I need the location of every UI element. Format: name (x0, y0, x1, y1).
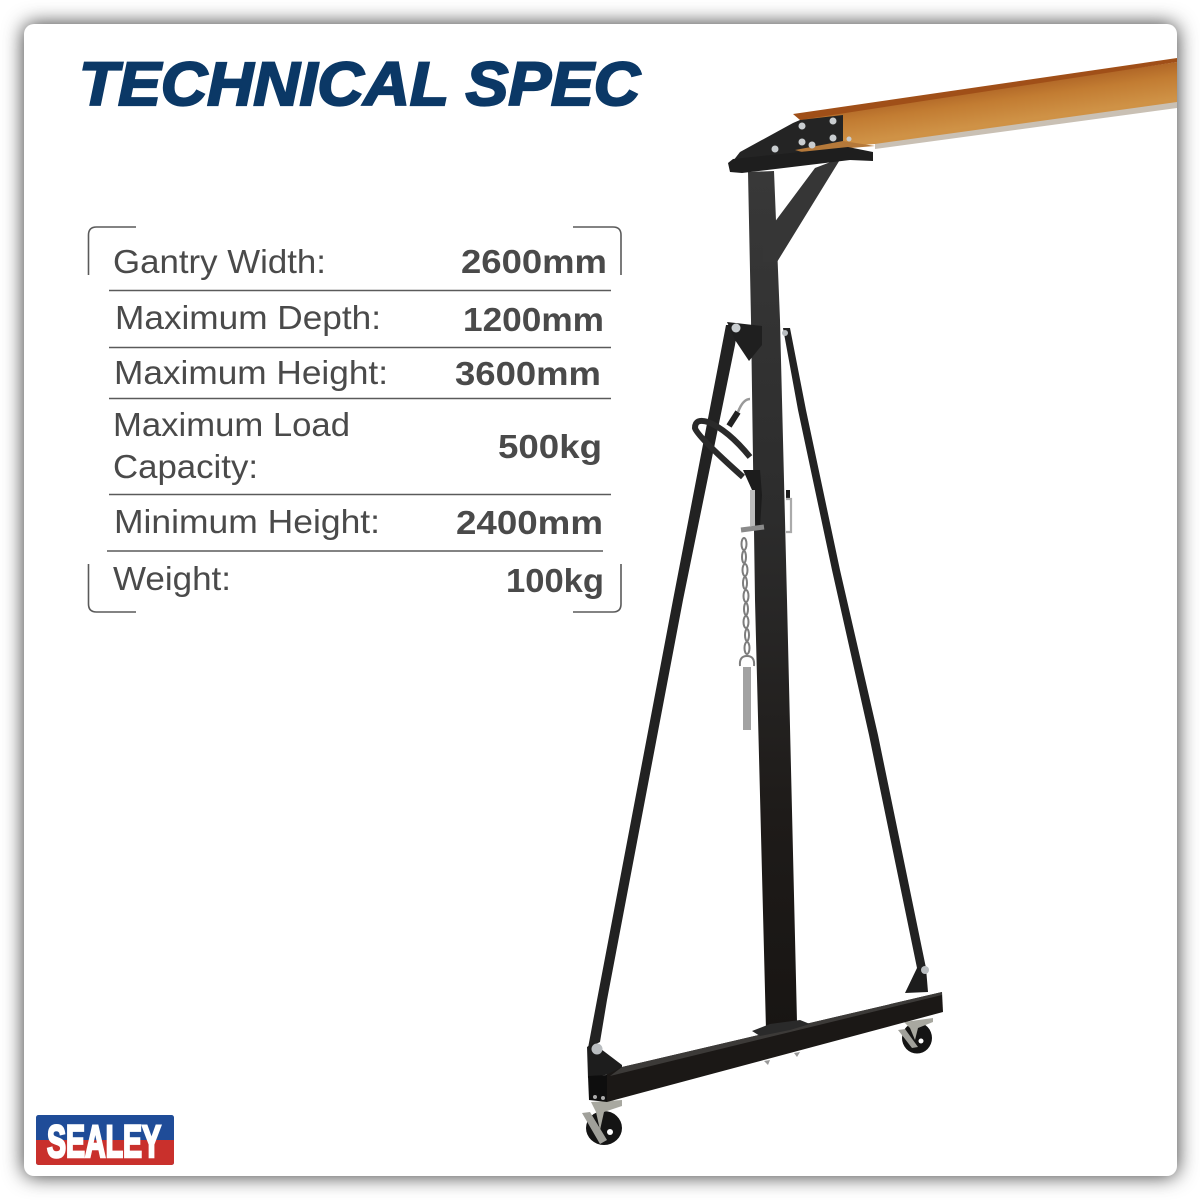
logo: Sealey: SEALEY (47, 1116, 161, 1167)
steel beam (793, 58, 1177, 150)
logo: Sealey (36, 1115, 174, 1167)
row: minimum height: 2400mm (456, 504, 603, 541)
row: weight: 100kg (506, 562, 604, 599)
mounting plate with bolts (733, 115, 875, 161)
row: maximum depth (115, 299, 604, 338)
right leg (783, 328, 926, 968)
row: minimum height (114, 503, 603, 541)
row: maximum depth: 1200mm (463, 301, 604, 338)
top leg brackets (727, 322, 788, 361)
row: maximum height (114, 354, 601, 392)
column foot plate (752, 1020, 810, 1065)
casters (582, 1018, 933, 1145)
brace (776, 161, 839, 261)
base gussets (587, 966, 929, 1078)
row: maximum load capacity: Capacity: (113, 448, 258, 485)
left leg (588, 325, 738, 1048)
row: maximum height: 3600mm (455, 355, 601, 392)
title: TECHNICAL SPEC (79, 50, 641, 118)
row dividers (107, 290, 611, 551)
row: maximum load capacity (113, 406, 602, 485)
chain (740, 538, 754, 666)
corner brackets (88, 227, 621, 612)
row: weight: Weight: (113, 560, 231, 597)
base bar (588, 992, 943, 1102)
row: maximum height: Maximum Height: (114, 354, 388, 391)
row: gantry width: 2600mm (461, 243, 607, 280)
handle grip stem (729, 399, 750, 426)
row: maximum load capacity: Maximum Load (113, 406, 350, 443)
handle loop (695, 421, 750, 477)
locking pin (743, 667, 751, 730)
panel: specification table (88, 227, 621, 612)
main column (748, 171, 797, 1030)
illustration: gantry crane (582, 58, 1177, 1145)
row: gantry width (113, 243, 607, 280)
row: weight (113, 560, 604, 599)
row: maximum depth: Maximum Depth: (115, 299, 381, 336)
top platform (728, 147, 873, 173)
row: maximum load capacity: 500kg (498, 428, 602, 465)
latch mechanism (741, 470, 791, 532)
row: minimum height: Minimum Height: (114, 503, 380, 540)
row: gantry width: Gantry Width: (113, 243, 326, 280)
